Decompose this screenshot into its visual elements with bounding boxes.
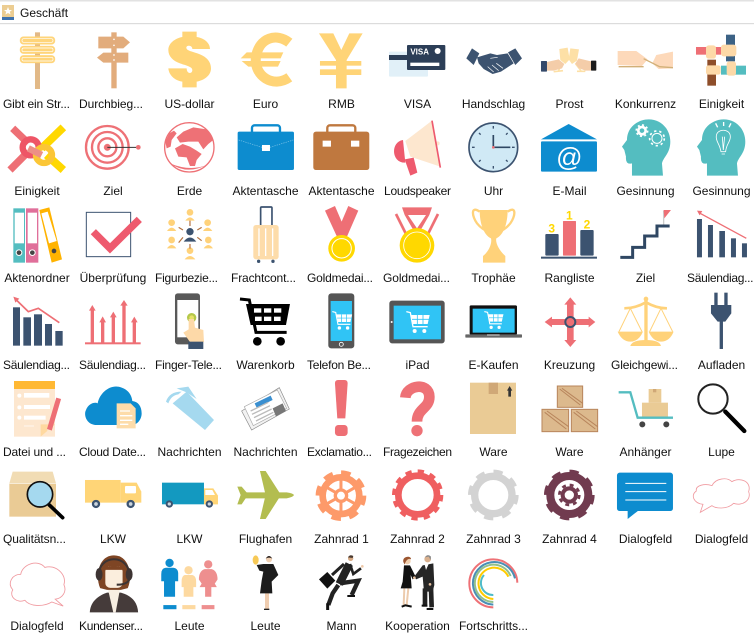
icon: Säulendiagramm with line: [13, 297, 63, 346]
label: Kreuzung: [544, 358, 595, 372]
icon: Zahnrad 4: [547, 472, 592, 518]
label: Nachrichten: [157, 445, 222, 459]
icon: Kreuzung: [545, 297, 595, 347]
label: Qualitätsn...: [3, 532, 66, 546]
icon: Gibt ein Str: [20, 32, 55, 89]
label: Prost: [555, 97, 584, 111]
icon: Handschlag: [466, 48, 522, 74]
label: Figurbezie...: [155, 271, 218, 285]
label: Konkurrenz: [615, 97, 676, 111]
icon: Nachrichten newspaper: [242, 388, 289, 430]
icon: Aktentasche brown: [313, 125, 369, 170]
icon: Fortschrittsbalken: [469, 559, 517, 607]
label: Ware: [555, 445, 584, 459]
label: Uhr: [484, 184, 503, 198]
icon: Leute colored: [161, 559, 218, 609]
icon: Zahnrad 3: [471, 472, 516, 518]
icon: E-Mail: [541, 124, 597, 172]
icon: Figurbeziehung: [167, 209, 213, 259]
icon: Lupe: [698, 384, 744, 431]
icon: Zahnrad 2: [394, 472, 441, 518]
label: Überprüfung: [80, 271, 146, 285]
icon: LKW yellow: [85, 480, 141, 507]
icon: Einigkeit hands: [696, 35, 746, 86]
label: Gesinnung: [692, 184, 751, 198]
icon: Finger-Telefon: [175, 293, 204, 349]
icon: Zahnrad 1: [319, 473, 363, 518]
label: Zahnrad 1: [314, 532, 369, 546]
icon: Säulendiagramm arrows: [85, 300, 141, 344]
label: Datei und ...: [3, 445, 66, 459]
heading text: Geschäft: [20, 6, 69, 20]
label: Lupe: [708, 445, 735, 459]
icon: Rangliste: 3: [548, 222, 555, 236]
icon: Rangliste: [541, 208, 597, 259]
label: LKW: [176, 532, 203, 546]
icon: Cloud Datei: [85, 387, 142, 428]
label: Gibt ein Str...: [3, 97, 70, 111]
label: Trophäe: [471, 271, 516, 285]
label: Leute: [250, 619, 281, 633]
icon: Dialogfeld blue: [617, 473, 673, 519]
icon: Loudspeaker: [394, 121, 440, 176]
icon: Frachtcontainer: [253, 207, 279, 263]
label: Rangliste: [544, 271, 595, 285]
label: Euro: [253, 97, 278, 111]
icon: LKW blue: [162, 483, 218, 507]
label: Einigkeit: [699, 97, 745, 111]
label: Mann: [326, 619, 357, 633]
label: Zahnrad 3: [466, 532, 521, 546]
icon: Leute woman: [253, 555, 278, 609]
label: Anhänger: [619, 445, 672, 459]
label: Nachrichten: [233, 445, 298, 459]
icon: Goldmedaille 2: [396, 207, 438, 263]
label: Flughafen: [239, 532, 292, 546]
label: RMB: [328, 97, 355, 111]
icon: VISA: [389, 45, 445, 77]
icon: Datei und Stift: [14, 381, 59, 437]
label: Aktentasche: [232, 184, 299, 198]
icon: Dialogfeld cloud right: [693, 479, 749, 512]
icon: Nachrichten rolled: [166, 387, 214, 430]
label: VISA: [404, 97, 431, 111]
label: Erde: [177, 184, 202, 198]
icon: iPad: [389, 301, 445, 343]
icon: US-dollar: [168, 32, 211, 87]
label: Fragezeichen: [383, 445, 452, 459]
label: Gesinnung: [616, 184, 675, 198]
icon: Flughafen: [237, 471, 294, 519]
header: Geschäft: [2, 5, 69, 20]
icon: Uhr: [469, 123, 518, 172]
label: Ziel: [636, 271, 655, 285]
label: Aktentasche: [308, 184, 375, 198]
icon: Rangliste: 2: [584, 217, 591, 231]
icon: Fragezeichen: [405, 387, 429, 436]
icon: Prost: [541, 48, 596, 72]
icon: Warenkorb: [240, 299, 290, 346]
icon: Einigkeit knot: [10, 127, 63, 170]
label: Säulendiag...: [79, 358, 146, 372]
icon: Kooperation: [401, 555, 434, 609]
icon: RMB: [319, 33, 363, 88]
icon: Rangliste: 1: [566, 208, 573, 222]
label: Frachtcont...: [231, 271, 296, 285]
icon: Ware box: [470, 383, 516, 434]
icon: E-Mail: @: [556, 142, 583, 172]
icon: Ziel target: [86, 126, 141, 169]
label: E-Mail: [552, 184, 587, 198]
label: Ware: [479, 445, 508, 459]
icon: category: [2, 5, 14, 20]
label: Säulendiag...: [687, 271, 754, 285]
label: Exclamatio...: [307, 445, 372, 459]
label: E-Kaufen: [468, 358, 519, 372]
label: Loudspeaker: [384, 184, 451, 198]
label: iPad: [405, 358, 430, 372]
icon: Aktenordner: [13, 207, 62, 263]
icon: Kundenservice: [90, 555, 138, 612]
label: US-dollar: [164, 97, 215, 111]
label: Gleichgewi...: [611, 358, 678, 372]
icon: Durchbieg: [97, 32, 130, 88]
label: Ziel: [103, 184, 123, 198]
label: Dialogfeld: [619, 532, 672, 546]
label: Zahnrad 4: [542, 532, 597, 546]
label: LKW: [100, 532, 127, 546]
icon: Aktentasche blue: [238, 125, 294, 170]
icon: Gleichgewicht: [618, 297, 674, 346]
label: Fortschritts...: [459, 619, 528, 633]
icon: Goldmedaille 1: [325, 206, 358, 262]
icon: Überprüfung: [86, 212, 139, 257]
icon: Euro: [241, 38, 289, 82]
label: Kooperation: [385, 619, 450, 633]
icon: Trophäe: [473, 210, 514, 263]
icon: Säulendiagramm falling: [697, 211, 747, 257]
label: Goldmedai...: [383, 271, 450, 285]
label: Handschlag: [462, 97, 525, 111]
icon: Qualitätsnachweis: [9, 472, 63, 518]
icon: Anhänger: [619, 389, 673, 427]
label: Aktenordner: [4, 271, 70, 285]
label: Zahnrad 2: [390, 532, 445, 546]
icon: VISA: VISA: [410, 48, 429, 57]
label: Einigkeit: [14, 184, 60, 198]
icon: Mann: [319, 555, 364, 610]
label: Goldmedai...: [307, 271, 373, 285]
icon: Gesinnung gears: [622, 119, 670, 176]
icon: Konkurrenz: [618, 51, 673, 69]
label: Kundenser...: [79, 619, 143, 633]
icon: Gesinnung bulb: [697, 119, 745, 176]
icon: Exclamation: [335, 380, 348, 436]
icon: Ware crates: [542, 386, 598, 432]
label: Cloud Date...: [79, 445, 146, 459]
label: Leute: [174, 619, 205, 633]
label: Säulendiag...: [3, 358, 70, 372]
label: Durchbieg...: [79, 97, 143, 111]
icon: Telefon Bezahlung: [328, 293, 354, 348]
label: Aufladen: [698, 358, 745, 372]
label: Finger-Tele...: [155, 358, 222, 372]
label: Dialogfeld: [695, 532, 748, 546]
icon: E-Kaufen: [465, 305, 522, 338]
icon: Erde: [165, 123, 214, 172]
label: Warenkorb: [236, 358, 295, 372]
label: Telefon Be...: [307, 358, 371, 372]
label: Dialogfeld: [10, 619, 64, 633]
icon: Dialogfeld cloud left: [10, 563, 65, 606]
icon: Ziel stairs: [620, 210, 671, 257]
icon: Aufladen: [711, 293, 731, 349]
